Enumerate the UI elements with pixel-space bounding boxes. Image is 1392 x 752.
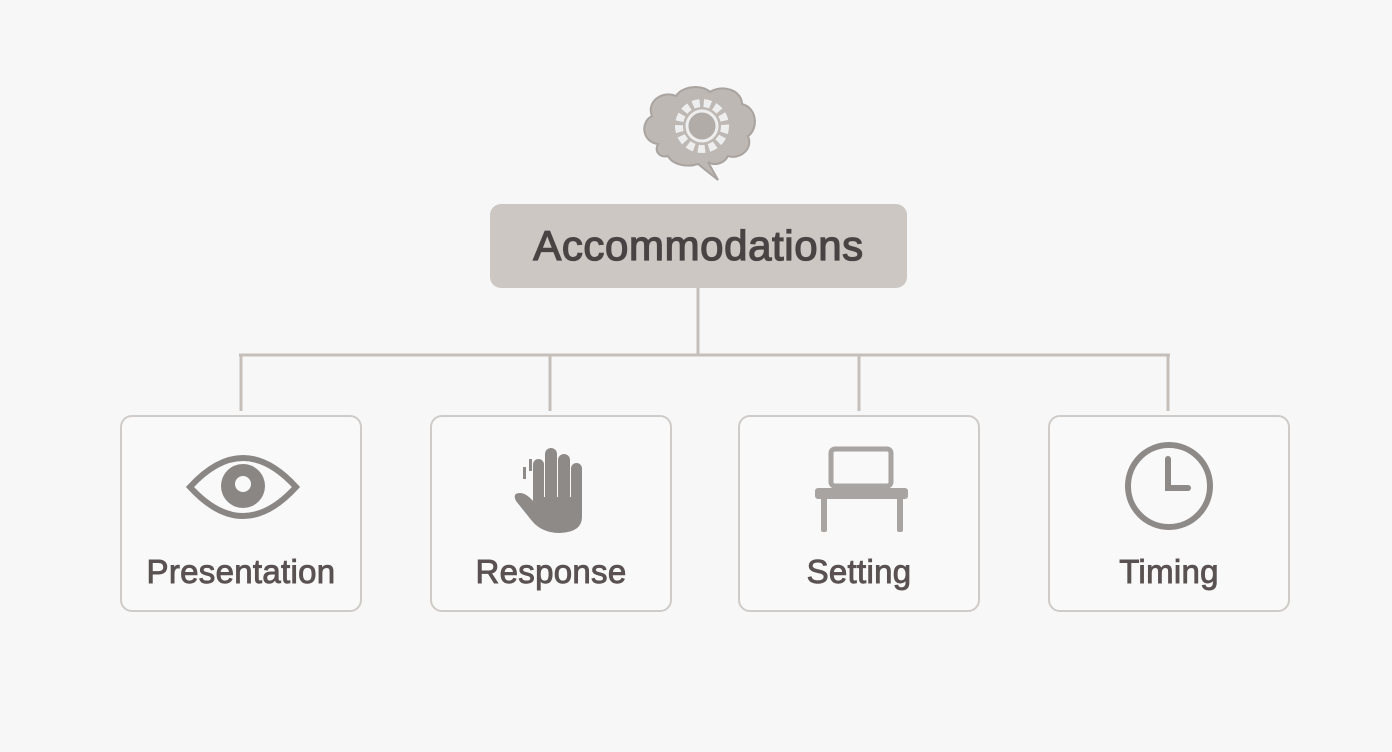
label: Response [476,553,626,590]
label: Timing [1119,553,1219,590]
panel: timing [1048,415,1290,612]
title [490,204,907,288]
label: Presentation [147,553,335,590]
panel: presentation [120,415,362,612]
icon: brain with gear [643,86,756,181]
icon: eye [186,455,300,519]
icon: hand [514,448,582,533]
icon: clock [1125,442,1213,530]
panel: setting [738,415,980,612]
label: Setting [807,553,911,590]
title: Accommodations [533,222,864,269]
icon: desk with monitor [815,446,908,532]
panel: response [430,415,672,612]
